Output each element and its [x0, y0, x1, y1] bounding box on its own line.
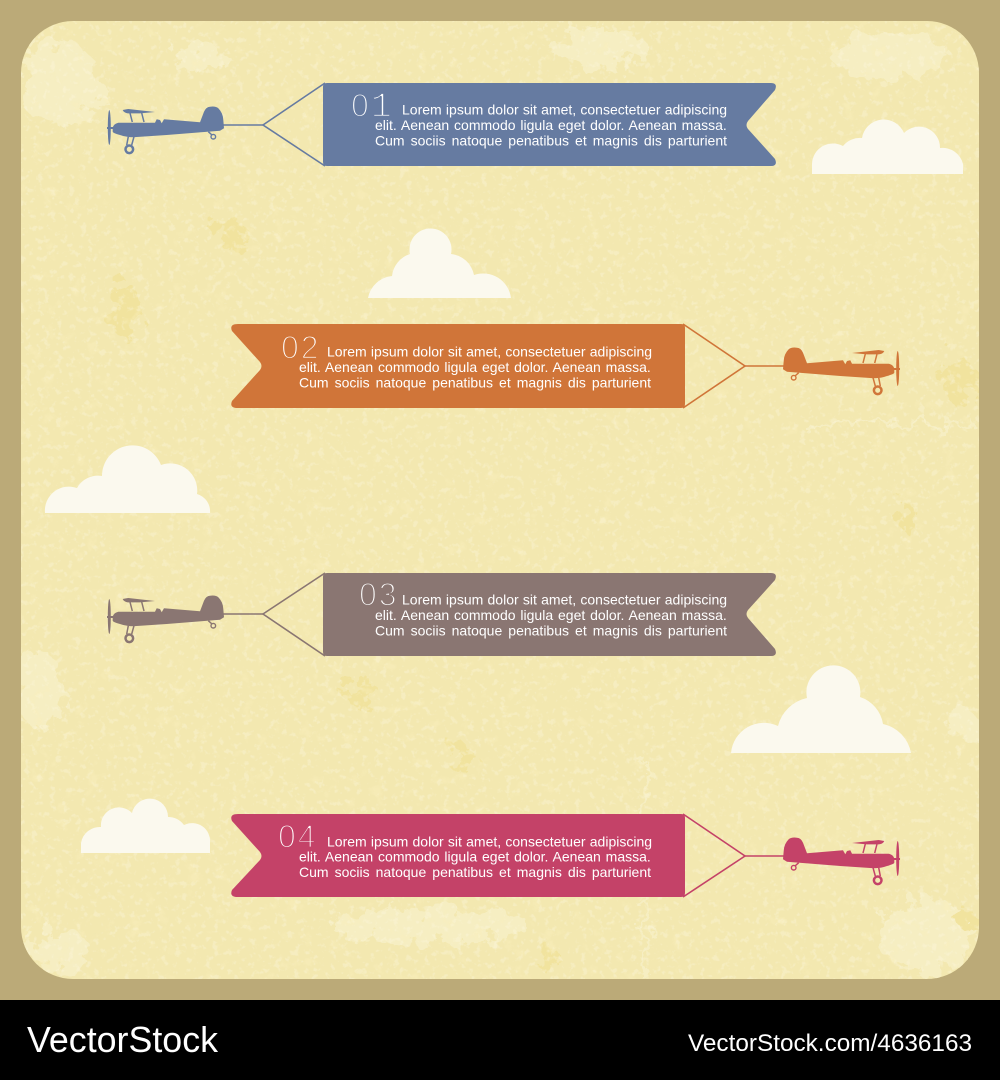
ribbon 04: [231, 814, 685, 897]
cloud 3: [45, 445, 210, 513]
number 03: 03: [359, 576, 399, 612]
text 01: Lorem ipsum dolor sit amet, consectetuer adipiscing: [402, 102, 727, 118]
text 02: elit. Aenean commodo ligula eget dolor. Aenean massa.: [299, 359, 651, 375]
text 04: Cum sociis natoque penatibus et magnis dis parturient: [299, 864, 651, 880]
tow lines 04: [683, 814, 745, 897]
cloud 1: [812, 120, 963, 174]
plane 04: [744, 838, 900, 884]
text 03: elit. Aenean commodo ligula eget dolor. Aenean massa.: [375, 607, 727, 623]
plane 01: [107, 107, 263, 153]
text 01: Cum sociis natoque penatibus et magnis dis parturient: [375, 132, 727, 148]
text 03: Cum sociis natoque penatibus et magnis dis parturient: [375, 622, 727, 638]
cloud 5: [81, 799, 210, 853]
banner 01 with plane: [107, 83, 776, 166]
footer bar: [0, 1000, 1000, 1080]
tow lines 03: [263, 573, 325, 656]
ribbon 02: [231, 324, 685, 408]
banner 02 with plane: [231, 324, 900, 408]
ribbon 03: [323, 573, 776, 656]
banner 04 with plane: [231, 814, 900, 897]
plane 03: [107, 596, 263, 642]
text 01: [375, 102, 727, 148]
text 02: Lorem ipsum dolor sit amet, consectetuer adipiscing: [327, 344, 652, 360]
number 02: 02: [281, 330, 321, 366]
text 01: elit. Aenean commodo ligula eget dolor. Aenean massa.: [375, 117, 727, 133]
tow lines 01: [263, 83, 325, 166]
plane 02: [744, 348, 900, 394]
text 04: elit. Aenean commodo ligula eget dolor. Aenean massa.: [299, 848, 651, 864]
cloud 4: [731, 665, 911, 753]
text 02: [299, 344, 652, 390]
text 03: [375, 592, 727, 638]
number 01: 01: [351, 88, 394, 128]
text 03: Lorem ipsum dolor sit amet, consectetuer adipiscing: [402, 592, 727, 608]
footer image id: VectorStock.com/4636163: [688, 1030, 972, 1057]
cloud 2: [368, 228, 511, 298]
tow lines 02: [683, 324, 745, 408]
text 04: Lorem ipsum dolor sit amet, consectetuer adipiscing: [327, 834, 652, 850]
number 04: 04: [278, 818, 318, 854]
text 04: [299, 834, 652, 880]
text 02: Cum sociis natoque penatibus et magnis dis parturient: [299, 374, 651, 390]
ribbon 01: [323, 83, 776, 166]
footer logo: VectorStock: [27, 1019, 219, 1060]
banner 03 with plane: [107, 573, 776, 656]
